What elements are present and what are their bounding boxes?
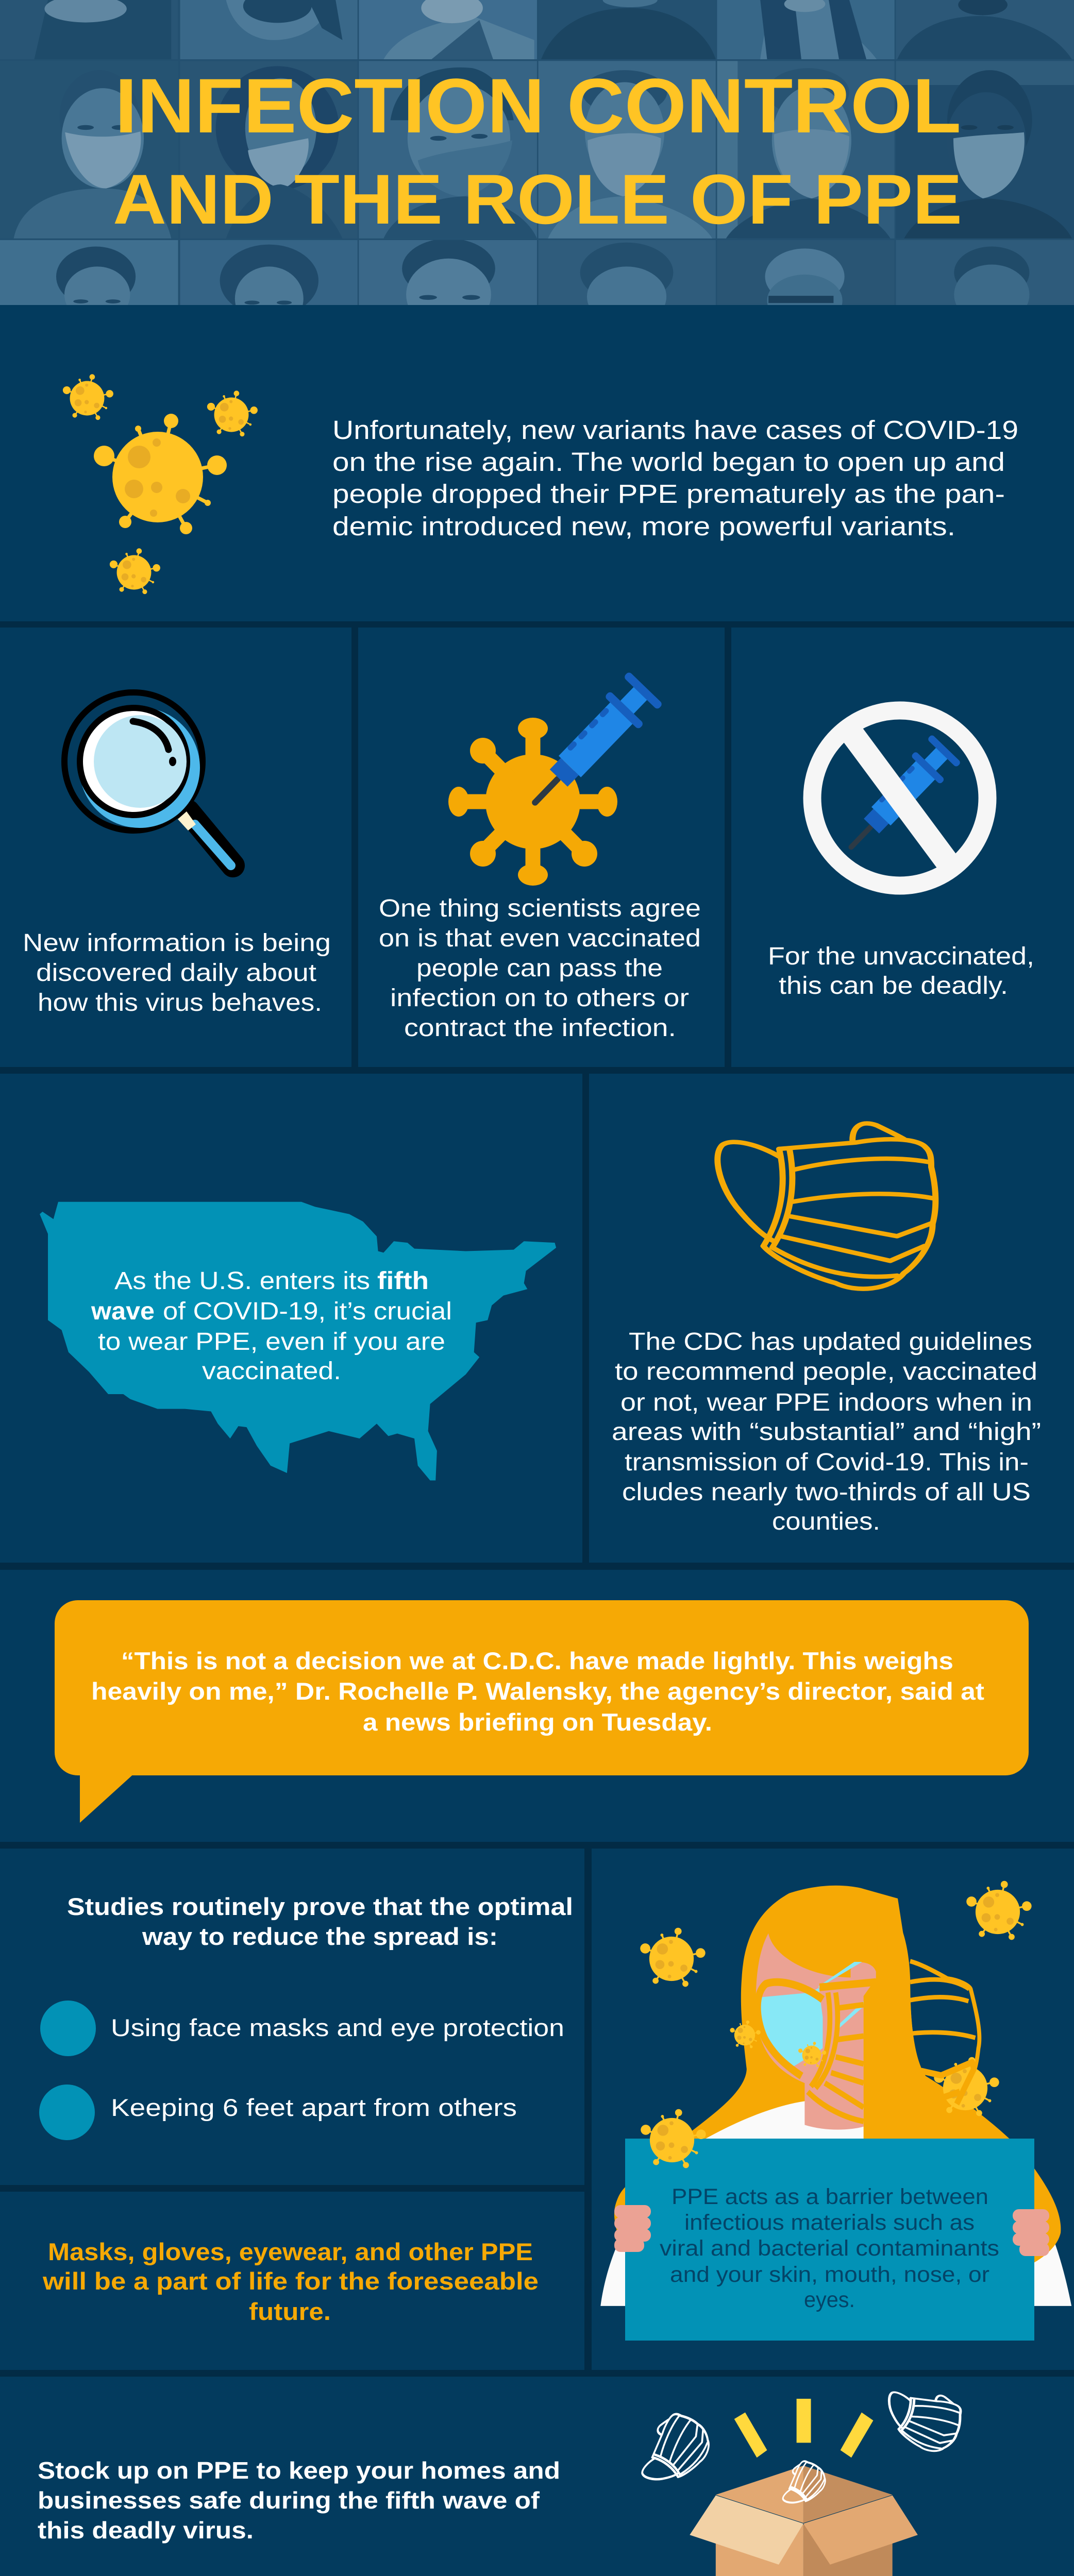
bullet list	[39, 2001, 564, 2140]
sign text: PPE acts as a barrier between	[672, 2184, 988, 2209]
text: CDC guidelines: cludes nearly two-thirds of all US	[622, 1479, 1031, 1506]
sign text: infectious materials such as	[684, 2210, 975, 2235]
text: CDC guidelines: areas with “substantial” and “high”	[612, 1418, 1041, 1446]
flying masks	[635, 2385, 965, 2514]
text: scientists agree: One thing scientists agree	[379, 895, 701, 922]
text: CDC guidelines: to recommend people, vaccinated	[615, 1358, 1037, 1385]
illustration: open box with masks	[635, 2385, 965, 2576]
sign	[625, 2139, 1034, 2341]
icon: magnifying glass	[64, 692, 233, 866]
text: masks gloves eyewear: future.	[249, 2298, 331, 2325]
yellow burst marks	[734, 2399, 873, 2458]
map of the United States	[40, 1202, 556, 1480]
text: CDC guidelines: counties.	[772, 1508, 880, 1535]
intro text: Unfortunately, new variants have cases of COVID-19	[332, 415, 1018, 445]
header photo grid of masked faces	[0, 0, 1074, 331]
sign text	[660, 2184, 999, 2312]
box back flaps	[716, 2466, 893, 2523]
panel dividers	[0, 621, 1074, 2377]
heading: reduce the spread	[67, 1893, 573, 1950]
text: stock up on PPE: businesses safe during the fifth wave of	[38, 2487, 540, 2514]
heading: reduce the spread: way to reduce the spread is:	[142, 1923, 498, 1950]
text: scientists agree: on is that even vaccinated	[379, 925, 701, 952]
hair	[614, 1886, 1061, 2262]
text: masks gloves eyewear: Masks, gloves, eyewear, and other PPE	[48, 2238, 533, 2265]
shirt	[600, 2100, 1071, 2306]
text: CDC guidelines: transmission of Covid-19. This in-	[625, 1449, 1029, 1476]
icon: virus with syringe	[448, 671, 663, 886]
text: scientists agree: infection on to others or	[390, 985, 689, 1012]
icon: no syringe prohibition sign	[812, 710, 987, 886]
text: for the unvaccinated: this can be deadly.	[779, 972, 1008, 999]
icon: group of coronavirus particles	[63, 374, 258, 594]
callout: quote speech bubble	[55, 1600, 1029, 1823]
sign virus	[641, 2109, 706, 2168]
bullet list: Keeping 6 feet apart from others	[111, 2094, 517, 2121]
title	[113, 62, 962, 239]
box body	[716, 2524, 893, 2576]
text: fifth wave: fifth	[377, 1267, 429, 1295]
text: for the unvaccinated: For the unvaccinated,	[768, 943, 1034, 970]
text: fifth wave: As the U.S. enters its	[114, 1267, 370, 1295]
intro text	[332, 415, 1018, 541]
sign text: and your skin, mouth, nose, or	[670, 2262, 989, 2287]
text: CDC guidelines: or not, wear PPE indoors when in	[620, 1389, 1032, 1416]
text: masks gloves eyewear	[42, 2238, 539, 2325]
intro text: people dropped their PPE prematurely as the pan-	[332, 479, 1005, 509]
text: stock up on PPE: Stock up on PPE to keep your homes and	[38, 2457, 560, 2484]
text: stock up on PPE	[38, 2457, 560, 2544]
callout: quote speech bubble: “This is not a decision we at C.D.C. have made lightly. This weighs	[121, 1647, 953, 1674]
bullet list: Using face masks and eye protection	[111, 2014, 564, 2041]
sign text: eyes.	[804, 2287, 855, 2312]
text: for the unvaccinated	[768, 943, 1034, 999]
face shield	[755, 1962, 862, 2069]
text: new information	[23, 929, 331, 1016]
viruses around the woman	[640, 1881, 1032, 2116]
mask straps and pleats	[758, 1961, 979, 2122]
title: INFECTION CONTROL	[115, 62, 961, 149]
text: stock up on PPE: this deadly virus.	[38, 2517, 254, 2544]
right hand	[1013, 2209, 1049, 2256]
text: scientists agree	[379, 895, 701, 1042]
text: fifth wave: vaccinated.	[202, 1358, 341, 1385]
text: fifth wave: of COVID-19, it’s crucial	[163, 1298, 452, 1325]
callout: quote speech bubble: a news briefing on Tuesday.	[363, 1708, 712, 1736]
left hand	[614, 2205, 651, 2252]
heading: reduce the spread: Studies routinely prove that the optimal	[67, 1893, 573, 1920]
illustration: woman in mask holding sign	[600, 1881, 1071, 2341]
shirt collar	[706, 2100, 864, 2139]
hair front	[861, 1888, 1010, 2139]
text: new information: how this virus behaves.	[38, 989, 322, 1016]
text: scientists agree: contract the infection.	[404, 1014, 676, 1042]
box front flaps	[690, 2495, 918, 2565]
text: CDC guidelines: The CDC has updated guidelines	[629, 1328, 1032, 1355]
intro text: demic introduced new, more powerful variants.	[332, 512, 955, 541]
text: fifth wave	[91, 1267, 452, 1385]
title: AND THE ROLE OF PPE	[113, 160, 962, 239]
text: masks gloves eyewear: will be a part of life for the foreseeable	[42, 2267, 539, 2295]
intro text: on the rise again. The world began to open up and	[332, 447, 1005, 477]
sign text: viral and bacterial contaminants	[660, 2236, 999, 2261]
face and neck	[756, 1934, 876, 2130]
text: CDC guidelines	[612, 1328, 1041, 1535]
icon: surgical mask outline	[717, 1124, 935, 1289]
mask edge over virus	[921, 2062, 974, 2104]
text: fifth wave: to wear PPE, even if you are	[98, 1328, 445, 1355]
text: scientists agree: people can pass the	[416, 955, 663, 982]
callout: quote speech bubble: heavily on me,” Dr. Rochelle P. Walensky, the agency’s director, said at	[91, 1677, 984, 1705]
text: new information: New information is being	[23, 929, 331, 957]
text: new information: discovered daily about	[36, 959, 316, 987]
text: fifth wave: wave	[91, 1298, 155, 1325]
